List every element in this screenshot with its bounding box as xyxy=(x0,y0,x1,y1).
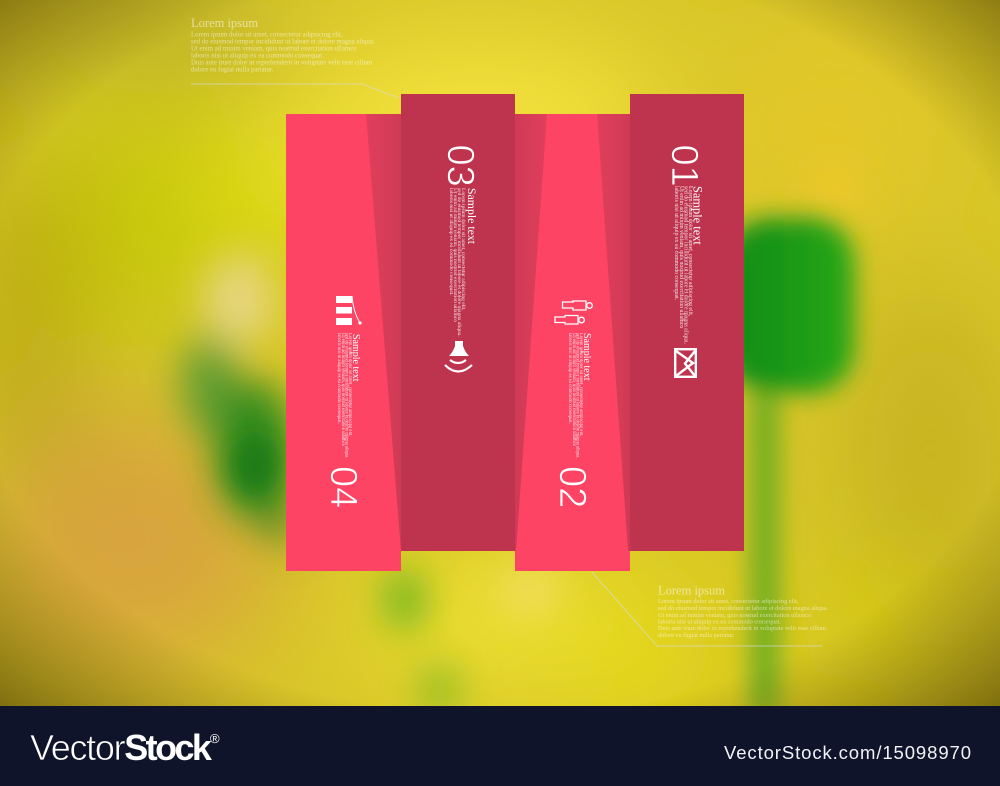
body text: Ut enim ad minim veniam, quis nostrud exercitation ullamco xyxy=(678,186,684,328)
body text: sed do eiusmod tempor incididunt ut labore et dolore magna aliqua. xyxy=(658,605,829,612)
number 01: 01 xyxy=(663,144,705,187)
bottom right leader line xyxy=(592,572,822,646)
heading: Lorem ipsum: Lorem ipsum xyxy=(658,584,725,598)
panel 04 xyxy=(286,114,401,571)
body text xyxy=(448,188,466,337)
body text: sed do eiusmod tempor incididunt ut labore et dolore magna aliqua. xyxy=(574,333,580,458)
body text: Ut enim ad minim veniam, quis nostrud exercitation ullamco xyxy=(340,333,345,447)
body text: laboris nisi ut aliquip ex ea commodo consequat. xyxy=(448,188,454,296)
top left leader line xyxy=(191,84,399,98)
body text: Lorem ipsum dolor sit amet, consectetur adipiscing elit, xyxy=(347,333,352,436)
body text: sed do eiusmod tempor incididunt ut labore et dolore magna aliqua. xyxy=(682,186,688,344)
body text: Duis aute irure dolor in reprehenderit in voluptate velit esse cillum xyxy=(658,625,826,632)
body text: sed do eiusmod tempor incididunt ut labore et dolore magna aliqua. xyxy=(344,333,348,458)
body text: Lorem ipsum dolor sit amet, consectetur adipiscing elit, xyxy=(191,32,343,38)
icon: envelope xyxy=(675,349,696,377)
panel 03 xyxy=(401,94,515,551)
bottom right text block xyxy=(658,584,829,639)
icon: bars with curve xyxy=(336,296,362,325)
body text: sed do eiusmod tempor incididunt ut labore et dolore magna aliqua. xyxy=(191,38,375,46)
body text: laboris nisi ut aliquip ex ea commodo consequat. xyxy=(336,333,341,424)
icon: two people xyxy=(555,301,592,324)
body text: Lorem ipsum dolor sit amet, consectetur adipiscing elit, xyxy=(578,333,583,436)
body text xyxy=(336,333,352,458)
label: Sample text: Sample text xyxy=(350,334,361,382)
body text: Lorem ipsum dolor sit amet, consectetur adipiscing elit, xyxy=(460,188,466,311)
body text: Lorem ipsum dolor sit amet, consectetur adipiscing elit, xyxy=(687,186,693,317)
body text xyxy=(673,186,693,344)
panel 02 xyxy=(515,114,630,571)
body text xyxy=(191,32,375,74)
body text: laboris nisi ut aliquip ex ea commodo consequat. xyxy=(673,186,679,301)
panel 01 xyxy=(630,94,744,551)
logo: VectorStock: VectorStock xyxy=(30,727,213,768)
body text xyxy=(658,598,829,639)
footer bar xyxy=(0,706,1000,786)
body text xyxy=(567,333,583,458)
body text: Ut enim ad minim veniam, quis nostrud exercitation ullamco xyxy=(191,46,357,52)
number 03: 03 xyxy=(439,144,481,187)
body text: laboris nisi ut aliquip ex ea commodo consequat. xyxy=(191,52,324,60)
body text: Ut enim ad minim veniam, quis nostrud exercitation ullamco xyxy=(571,333,576,447)
image id: VectorStock.com/15098970 xyxy=(724,742,971,763)
label: Sample text: Sample text xyxy=(690,186,704,245)
body text: Ut enim ad minim veniam, quis nostrud exercitation ullamco xyxy=(452,188,458,322)
registered mark: ® xyxy=(210,731,220,746)
number 02: 02 xyxy=(551,466,593,508)
label: Sample text: Sample text xyxy=(581,333,592,381)
body text: Lorem ipsum dolor sit amet, consectetur adipiscing elit, xyxy=(658,598,799,605)
body text: Duis aute irure dolor in reprehenderit in voluptate velit esse cillum xyxy=(191,60,373,66)
body text: laboris nisi ut aliquip ex ea commodo consequat. xyxy=(658,618,782,626)
body text: laboris nisi ut aliquip ex ea commodo consequat. xyxy=(567,333,572,424)
body text: dolore eu fugiat nulla pariatur. xyxy=(191,66,274,74)
icon: bell with waves xyxy=(445,341,472,372)
number 04: 04 xyxy=(322,466,364,508)
body text: Ut enim ad minim veniam, quis nostrud exercitation ullamco xyxy=(658,612,811,619)
body text: sed do eiusmod tempor incididunt ut labore et dolore magna aliqua. xyxy=(456,188,462,337)
top left text block xyxy=(191,16,375,74)
heading: Lorem ipsum: Lorem ipsum xyxy=(191,16,258,30)
label: Sample text: Sample text xyxy=(465,188,479,245)
body text: dolore eu fugiat nulla pariatur. xyxy=(658,632,735,639)
